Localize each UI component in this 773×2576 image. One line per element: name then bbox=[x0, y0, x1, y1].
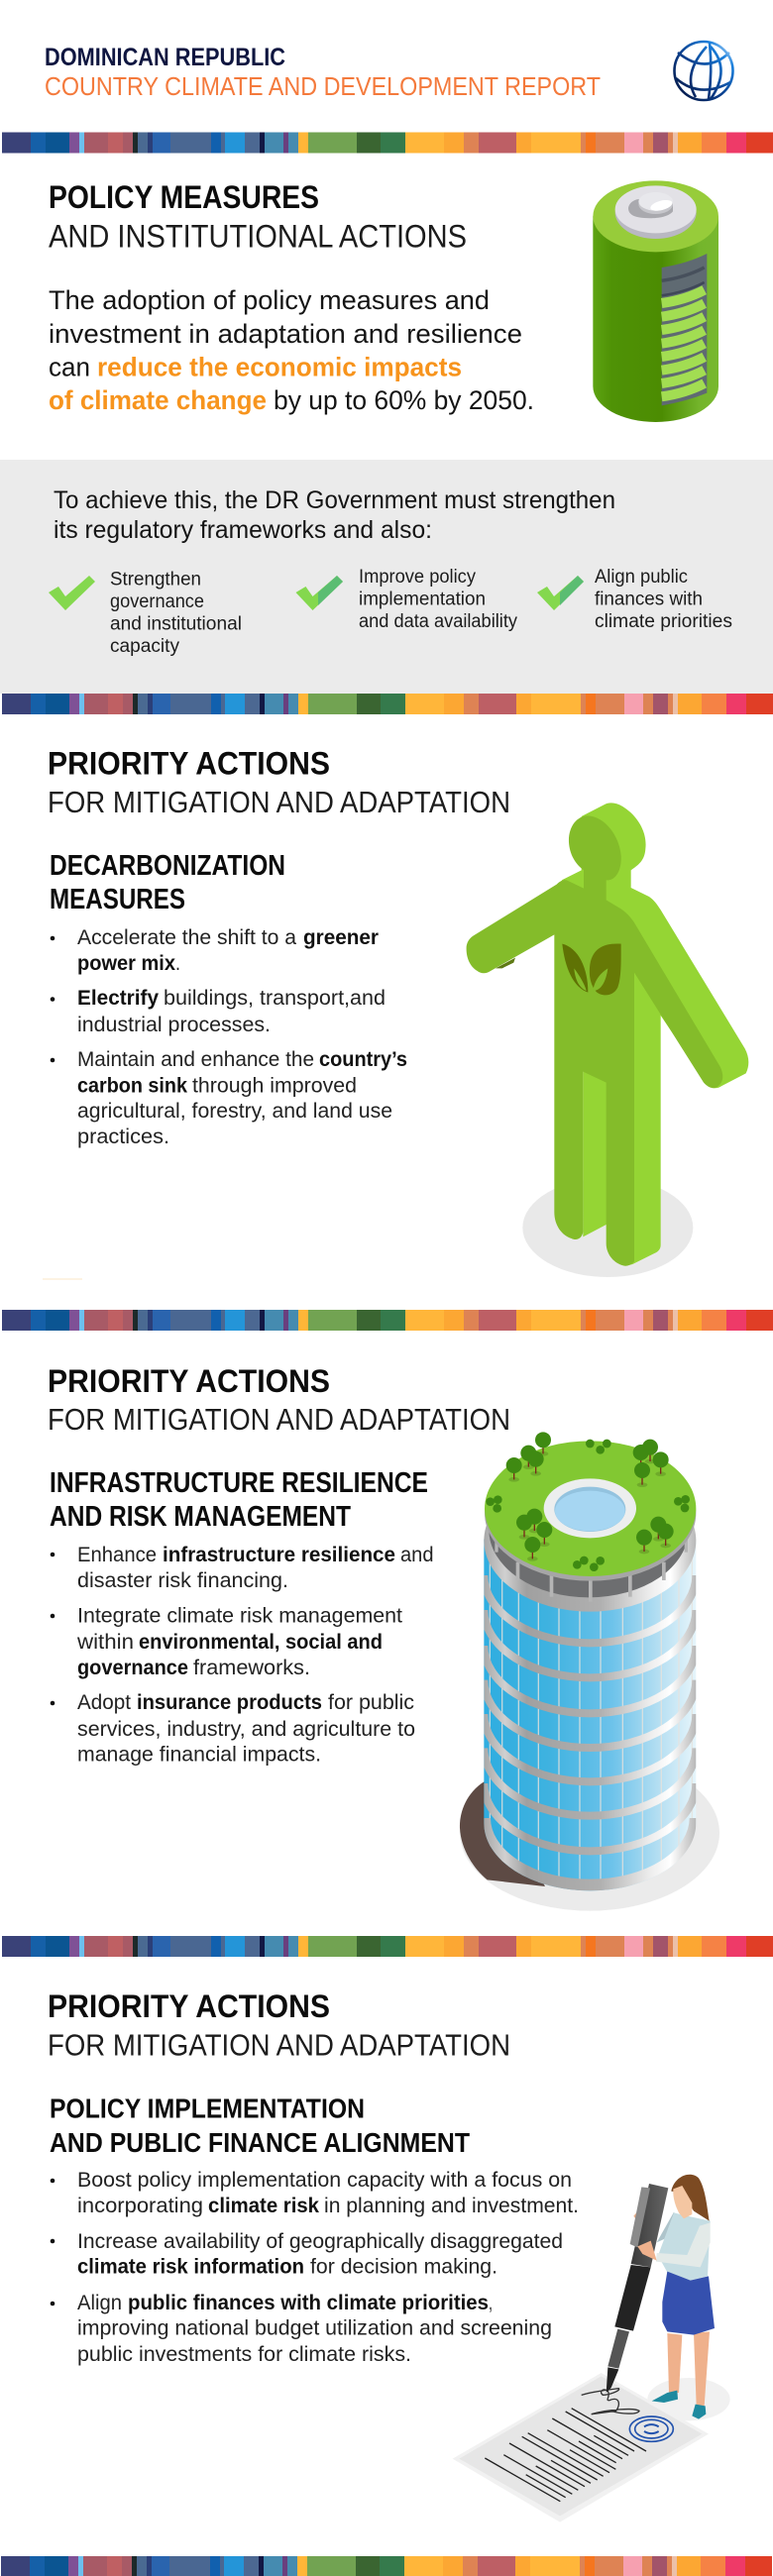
item: align public finances: climate priorities bbox=[595, 611, 732, 632]
item: improve policy: and data availability bbox=[359, 611, 517, 632]
icon: check mark 1 bbox=[49, 576, 95, 610]
floor rings bbox=[484, 1575, 696, 1885]
divider: colour strip 5 bbox=[1, 2556, 772, 2576]
heading: policy measures: AND INSTITUTIONAL ACTIONS bbox=[49, 218, 467, 254]
item: improve policy: implementation bbox=[359, 589, 486, 610]
bullet list: policy implementation: for decision making. bbox=[310, 2255, 497, 2279]
icon: World Bank globe logo bbox=[674, 42, 733, 100]
heading: priority actions 2: PRIORITY ACTIONS bbox=[48, 1363, 330, 1399]
bullet list: decarbonization: industrial processes. bbox=[77, 1014, 271, 1036]
bullet list: policy implementation: , bbox=[489, 2292, 493, 2314]
bullet list: decarbonization: practices. bbox=[77, 1126, 169, 1148]
document bbox=[453, 2373, 709, 2522]
header: report title bbox=[45, 44, 601, 101]
subheading: infrastructure resilience: AND RISK MANAGEMENT bbox=[50, 1501, 351, 1533]
divider: colour strip 2 bbox=[2, 694, 773, 714]
heading: priority actions 1: PRIORITY ACTIONS bbox=[48, 745, 330, 781]
subheading: infrastructure resilience bbox=[50, 1467, 428, 1533]
rail posts bbox=[495, 1539, 688, 1602]
bullet list: infrastructure: frameworks. bbox=[193, 1657, 310, 1679]
header: report title: COUNTRY CLIMATE AND DEVELOPMENT REPORT bbox=[45, 71, 601, 101]
bullet list: infrastructure bbox=[51, 1544, 433, 1766]
icon: check mark 2 bbox=[295, 576, 343, 610]
text block: intro paragraph: reduce the economic impacts bbox=[97, 353, 462, 382]
icon: green-roofed tower bbox=[460, 1432, 719, 1911]
bullet list: decarbonization: country’s bbox=[319, 1048, 407, 1071]
text: panel intro bbox=[54, 486, 615, 544]
heading: policy measures bbox=[49, 179, 467, 254]
subheading: policy implementation bbox=[50, 2093, 470, 2158]
text: panel intro: To achieve this, the DR Government must strengthen bbox=[54, 486, 615, 514]
subheading: infrastructure resilience: INFRASTRUCTURE RESILIENCE bbox=[50, 1467, 428, 1499]
heading: priority actions 1: FOR MITIGATION AND ADAPTATION bbox=[48, 785, 510, 819]
heading: priority actions 2 bbox=[48, 1363, 510, 1437]
heading: policy measures: POLICY MEASURES bbox=[49, 179, 319, 215]
bullet list: policy implementation: Align bbox=[77, 2292, 122, 2314]
person bbox=[633, 2175, 715, 2419]
bullet list: decarbonization: . bbox=[175, 952, 180, 975]
item: align public finances: Align public bbox=[595, 567, 688, 588]
signature bbox=[582, 2389, 639, 2415]
bullet list: infrastructure: services, industry, and agriculture to bbox=[77, 1718, 415, 1741]
item: strengthen governance bbox=[110, 569, 242, 657]
bullet list: infrastructure: within bbox=[76, 1631, 134, 1654]
bullet list: policy implementation: public finances with climate priorities bbox=[128, 2292, 489, 2314]
icon: green battery bbox=[593, 180, 718, 422]
bullet list: decarbonization: buildings, transport,and bbox=[164, 987, 386, 1010]
divider: colour strip 3 bbox=[2, 1310, 773, 1331]
text block: intro paragraph: The adoption of policy measures and bbox=[49, 285, 490, 315]
bullet list: policy implementation: climate risk bbox=[208, 2195, 319, 2217]
divider: colour strip 4 bbox=[2, 1936, 773, 1957]
bullet list: policy implementation: climate risk information bbox=[77, 2255, 304, 2279]
bullet list: policy implementation: Increase availability of geographically disaggregated bbox=[77, 2230, 563, 2253]
bullet list: infrastructure: Adopt bbox=[77, 1691, 131, 1714]
bullet list: policy implementation: in planning and investment. bbox=[324, 2195, 579, 2217]
panel: government actions bbox=[0, 460, 773, 694]
stamp bbox=[629, 2416, 673, 2441]
item: improve policy: Improve policy bbox=[359, 567, 476, 588]
heading: priority actions 3 bbox=[48, 1988, 510, 2063]
heading: priority actions 3: FOR MITIGATION AND ADAPTATION bbox=[48, 2027, 510, 2063]
bullet list: decarbonization: through improved bbox=[192, 1074, 357, 1098]
divider: colour strip 1 bbox=[2, 133, 773, 153]
heading: priority actions 3: PRIORITY ACTIONS bbox=[48, 1988, 330, 2024]
bullet list: infrastructure: insurance products bbox=[137, 1691, 322, 1714]
bullet list: decarbonization: Maintain and enhance the bbox=[77, 1048, 314, 1071]
heading: priority actions 2: FOR MITIGATION AND ADAPTATION bbox=[48, 1402, 510, 1437]
item: align public finances: finances with bbox=[595, 589, 703, 610]
text block: intro paragraph: investment in adaptation and resilience bbox=[49, 319, 522, 349]
icon: leaves on chest bbox=[562, 944, 621, 995]
item: strengthen governance: Strengthen bbox=[110, 569, 201, 590]
item: align public finances bbox=[595, 567, 732, 632]
text: panel intro: its regulatory frameworks and also: bbox=[54, 516, 432, 544]
bullet list: policy implementation bbox=[51, 2169, 579, 2366]
bullet list: infrastructure: disaster risk financing. bbox=[77, 1569, 288, 1592]
bullet list: infrastructure: environmental, social and bbox=[139, 1631, 383, 1654]
item: strengthen governance: capacity bbox=[110, 636, 179, 657]
text block: intro paragraph bbox=[49, 285, 534, 415]
bullet list: infrastructure: Enhance bbox=[77, 1544, 157, 1566]
bullet list: decarbonization: carbon sink bbox=[77, 1074, 187, 1098]
bullet list: decarbonization: power mix bbox=[77, 952, 175, 975]
text block: intro paragraph: by up to 60% by 2050. bbox=[274, 385, 534, 415]
bullet list: infrastructure: infrastructure resilience bbox=[163, 1544, 395, 1566]
bullet list: decarbonization bbox=[51, 926, 407, 1148]
bullet list: infrastructure: governance bbox=[77, 1657, 188, 1679]
bullet list: policy implementation: incorporating bbox=[77, 2195, 203, 2217]
subheading: decarbonization measures: DECARBONIZATION bbox=[50, 850, 285, 882]
icon: check mark 3 bbox=[537, 576, 584, 610]
heading: priority actions 1 bbox=[48, 745, 510, 819]
bullet list: infrastructure: manage financial impacts. bbox=[77, 1744, 321, 1766]
header: report title: DOMINICAN REPUBLIC bbox=[45, 44, 285, 71]
subheading: decarbonization measures bbox=[50, 850, 285, 915]
pen bbox=[607, 2184, 668, 2393]
subheading: policy implementation: AND PUBLIC FINANCE ALIGNMENT bbox=[50, 2127, 470, 2158]
bullet list: decarbonization: Accelerate the shift to a bbox=[77, 926, 296, 949]
bullet list: decarbonization: Electrify bbox=[77, 987, 159, 1010]
item: strengthen governance: and institutional bbox=[110, 614, 242, 634]
bullet list: policy implementation: improving national budget utilization and screening bbox=[77, 2316, 552, 2340]
bullet list: infrastructure: Integrate climate risk management bbox=[77, 1605, 402, 1627]
item: strengthen governance: governance bbox=[110, 591, 204, 612]
text block: intro paragraph: can bbox=[49, 353, 90, 382]
item: improve policy bbox=[359, 567, 517, 632]
subheading: policy implementation: POLICY IMPLEMENTATION bbox=[50, 2093, 365, 2124]
subheading: decarbonization measures: MEASURES bbox=[50, 884, 185, 915]
rooftop pool bbox=[544, 1478, 636, 1538]
bullet list: policy implementation: public investments for climate risks. bbox=[77, 2343, 411, 2366]
bullet list: infrastructure: and bbox=[400, 1544, 434, 1566]
rooftop trees bbox=[486, 1432, 690, 1571]
window mullions bbox=[490, 1558, 692, 1890]
icon: woman signing document with giant pen bbox=[453, 2175, 730, 2522]
bullet list: infrastructure: for public bbox=[328, 1691, 414, 1714]
bullet list: decarbonization: greener bbox=[303, 926, 379, 949]
icon: green human figure with leaf bbox=[467, 803, 748, 1277]
bullet list: decarbonization: agricultural, forestry, and land use bbox=[77, 1100, 392, 1123]
bullet list: policy implementation: Boost policy implementation capacity with a focus on bbox=[77, 2169, 572, 2192]
text block: intro paragraph: of climate change bbox=[49, 385, 267, 415]
